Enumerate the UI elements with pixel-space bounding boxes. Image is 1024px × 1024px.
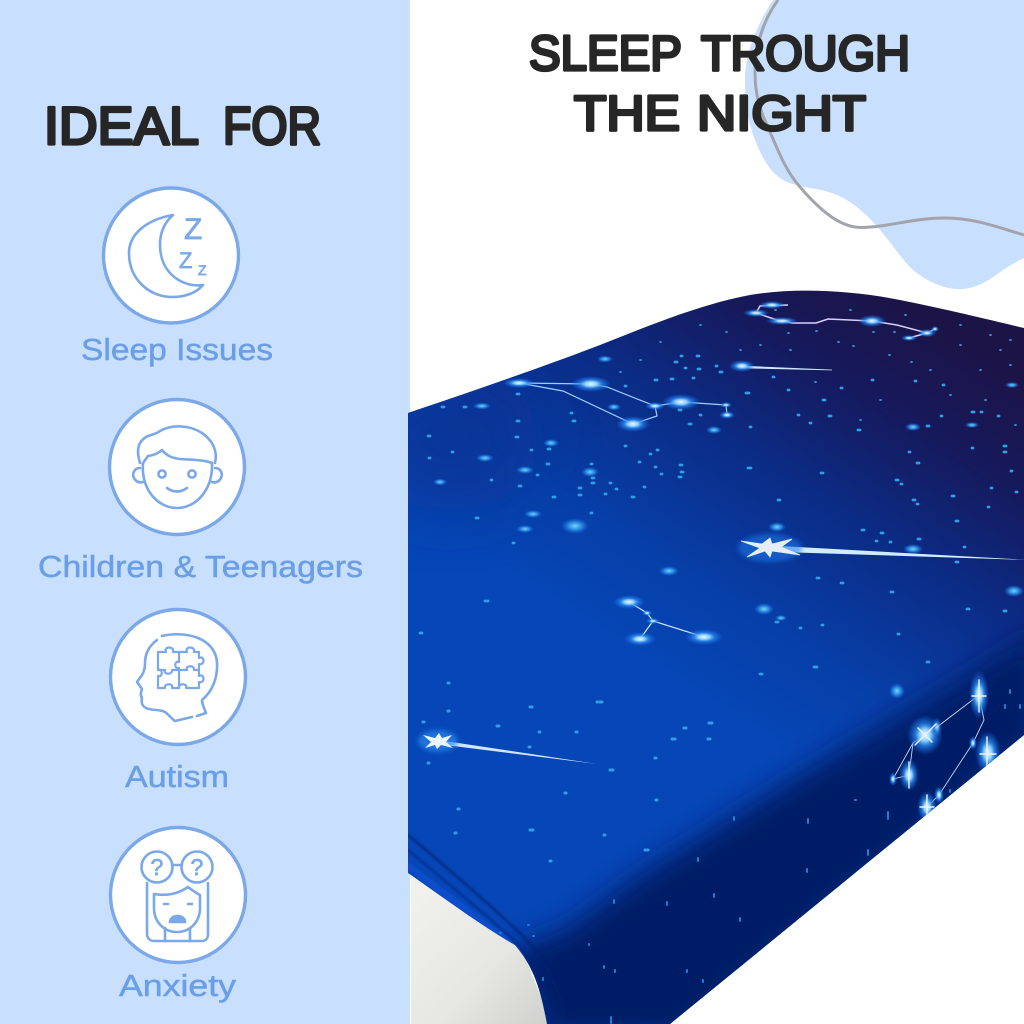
small shooting star: [729, 360, 832, 372]
shaded upper-left area: [408, 374, 524, 516]
icon: head with puzzle: [137, 634, 217, 721]
decorative curved line: [755, 0, 1024, 235]
label: anxiety: Anxiety: [119, 968, 237, 1003]
stars on lower sheet: [423, 683, 712, 861]
white mattress corner: [411, 868, 552, 1024]
sparkle spikes: [909, 680, 996, 820]
sheet base: [408, 280, 1024, 1024]
icon: moon with z letters: [129, 213, 207, 297]
heading: sleep trough the night: TROUGH: [701, 27, 910, 81]
icon: child face: [133, 426, 222, 508]
label: autism: Autism: [125, 759, 229, 794]
heading: ideal for: IDEAL: [44, 97, 197, 156]
left constellation: [503, 376, 735, 432]
dark side fold: [510, 630, 1024, 1024]
icon: person with question marks: [142, 852, 212, 941]
faint stars on side fold: [500, 690, 1020, 1023]
label: children and teenagers: Children & Teenagers: [38, 549, 363, 584]
cross constellation: [613, 595, 723, 646]
panel: ideal for: [0, 0, 410, 1024]
icon: moon with z letters: Z: [198, 262, 207, 278]
top constellation: [743, 301, 939, 341]
small stars: [420, 356, 1017, 674]
icon text: question marks: ?: [190, 854, 203, 880]
gathered hem: [408, 833, 541, 995]
medium glowing stars: [433, 356, 1024, 699]
item: autism: [110, 610, 246, 794]
icon: moon with z letters: Z: [179, 248, 192, 273]
decorative blob: top right: [745, 0, 1024, 289]
heading: sleep trough the night: THE: [574, 87, 680, 141]
icon text: question marks: ?: [150, 854, 163, 880]
heading: sleep trough the night: SLEEP: [529, 27, 681, 81]
tiny stars on dark upper sheet: [620, 310, 1016, 425]
label: sleep issues: Sleep Issues: [81, 332, 273, 367]
heading: sleep trough the night: NIGHT: [697, 87, 866, 141]
item: sleep issues: [81, 188, 273, 367]
icon: moon with z letters: Z: [184, 213, 202, 246]
lower shooting star: [418, 730, 597, 764]
heading: sleep trough the night: [529, 27, 910, 141]
side constellation: [889, 671, 1001, 823]
product photo: night-sky fitted sheet: [360, 280, 1024, 1024]
heading: ideal for: FOR: [223, 97, 321, 156]
item: children and teenagers: [38, 400, 363, 584]
item: anxiety: [110, 828, 246, 1003]
big shooting star: [738, 534, 1024, 562]
icon text: question marks: [150, 854, 203, 880]
